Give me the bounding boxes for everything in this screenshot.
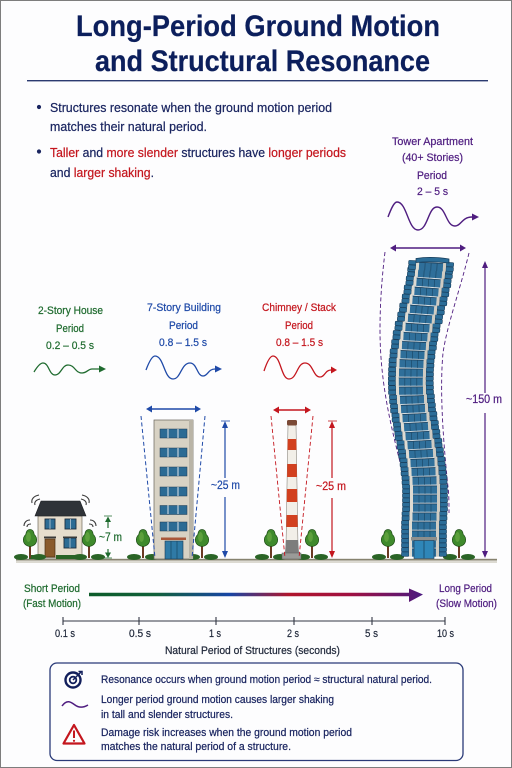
axis tick labels: 1 s <box>209 628 221 640</box>
axis tick labels: 0.1 s <box>55 628 75 640</box>
icon: warning triangle <box>64 725 84 744</box>
building illustration <box>154 420 193 559</box>
icon: target <box>66 672 82 688</box>
house shake marks <box>24 495 96 527</box>
building trees <box>127 530 218 560</box>
tower illustration <box>388 257 454 558</box>
house labels <box>38 305 103 352</box>
axis title: Natural Period of Structures (seconds) <box>165 645 340 657</box>
building width arrow <box>146 406 201 412</box>
axis tick labels: 5 s <box>365 628 378 640</box>
panel: 7-story building <box>127 302 240 560</box>
building height arrow: ~25 m <box>211 478 240 492</box>
damage risk text: matches the natural period of a structure. <box>101 741 291 753</box>
chimney labels <box>262 302 336 349</box>
long period label: Long Period <box>439 583 492 595</box>
intro bullets: matches their natural period. <box>50 120 207 134</box>
title: and Structural Resonance <box>95 45 430 78</box>
house trees <box>14 530 105 560</box>
period axis <box>55 617 454 640</box>
title <box>76 10 440 78</box>
title rule <box>27 80 488 81</box>
chimney illustration <box>282 420 301 559</box>
building wave <box>146 356 222 379</box>
chimney height arrow: ~25 m <box>316 479 346 493</box>
shaking text: in tall and slender structures. <box>101 709 233 721</box>
tower height arrow: ~150 m <box>466 392 502 406</box>
house illustration <box>29 501 86 558</box>
building labels: Period <box>169 320 198 332</box>
panel: 2-story house <box>14 305 122 560</box>
house labels: 2-Story House <box>38 305 103 317</box>
tower labels: (40+ Stories) <box>402 152 463 164</box>
building height arrow <box>211 421 240 558</box>
tower wave <box>388 202 479 230</box>
damage risk text <box>101 727 352 753</box>
chimney labels: Chimney / Stack <box>262 302 336 314</box>
axis tick labels <box>55 628 454 640</box>
short period label: (Fast Motion) <box>23 598 81 610</box>
axis tick labels: 10 s <box>437 628 454 640</box>
intro bullets: Structures resonate when the ground motion period <box>50 101 332 115</box>
short period label <box>23 583 81 610</box>
intro bullets: Taller and more slender structures have longer periods <box>50 146 346 160</box>
house wave <box>34 363 106 375</box>
chimney width arrow <box>273 406 311 414</box>
icon: wave <box>62 702 88 707</box>
chimney trees <box>255 530 328 560</box>
axis tick labels: 0.5 s <box>129 628 151 640</box>
tower labels <box>392 136 473 198</box>
house labels: 0.2 – 0.5 s <box>46 340 94 352</box>
building sway envelope <box>141 416 205 558</box>
intro bullets: and larger shaking. <box>50 166 154 180</box>
tower trees <box>372 530 475 560</box>
tower labels: Tower Apartment <box>392 136 473 148</box>
panel: chimney <box>255 302 346 560</box>
axis tick labels: 2 s <box>287 628 299 640</box>
building labels <box>147 302 221 349</box>
tower width arrow <box>390 244 466 252</box>
damage risk text: Damage risk increases when the ground motion period <box>101 727 352 739</box>
period spectrum arrow <box>89 588 423 602</box>
tower sway envelope <box>380 252 469 513</box>
house labels: Period <box>56 323 84 335</box>
chimney sway envelope <box>271 416 313 558</box>
building labels: 0.8 – 1.5 s <box>159 337 207 349</box>
resonance text: Resonance occurs when ground motion period ≈ structural natural period. <box>101 674 432 686</box>
tower height arrow <box>466 261 502 558</box>
house height arrow <box>99 516 122 558</box>
short period label: Short Period <box>24 583 80 595</box>
shaking text <box>101 694 334 721</box>
chimney height arrow <box>316 421 346 558</box>
chimney wave <box>264 356 337 379</box>
ground line <box>16 559 497 563</box>
tower labels: Period <box>417 170 447 182</box>
title: Long-Period Ground Motion <box>76 10 440 43</box>
long period label: (Slow Motion) <box>436 598 497 610</box>
building labels: 7-Story Building <box>147 302 221 314</box>
chimney labels: Period <box>285 320 313 332</box>
panel: tower apartment <box>372 136 502 560</box>
chimney labels: 0.8 – 1.5 s <box>276 337 323 349</box>
tower labels: 2 – 5 s <box>417 186 448 198</box>
callout: key takeaways <box>50 663 463 760</box>
shaking text: Longer period ground motion causes larger shaking <box>101 694 334 706</box>
house height arrow: ~7 m <box>99 530 122 544</box>
long period label <box>436 583 497 610</box>
intro bullets <box>37 101 346 180</box>
